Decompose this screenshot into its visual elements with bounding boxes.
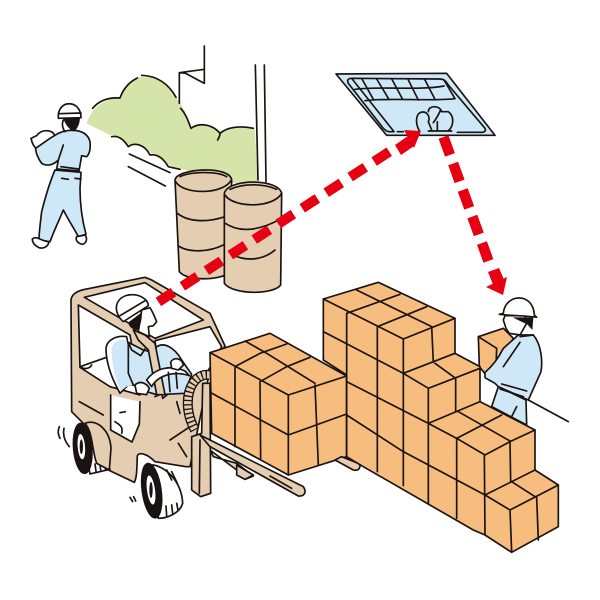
helmet [58, 104, 81, 118]
background scene: bush and wall [87, 46, 282, 292]
steering wheel [147, 368, 189, 387]
seat [106, 336, 135, 393]
worker walking, upper left [31, 104, 90, 248]
wall silhouette [323, 282, 558, 552]
cab roof bar and pillar [133, 330, 165, 395]
hair [513, 317, 533, 330]
rear side window [78, 305, 140, 395]
fork tip behind wall of boxes [335, 457, 360, 470]
jacket details [500, 335, 533, 417]
box edges [323, 290, 558, 552]
mirror inner edge and shelving [348, 78, 485, 132]
icon: oil drum rear [175, 170, 232, 279]
bush [87, 75, 257, 183]
floor line [528, 400, 568, 422]
forklift body and cab frame [71, 277, 225, 482]
helmet [499, 298, 537, 317]
jacket and trouser details [58, 113, 81, 179]
motion marks [58, 427, 136, 502]
lift chain hose [188, 375, 210, 430]
hair [63, 118, 80, 132]
mirror reflection of boxes and figures [417, 107, 453, 131]
carried parcel [31, 131, 54, 152]
stack of boxes on forks [210, 333, 347, 475]
forklift with driver [58, 277, 253, 519]
hands [135, 359, 183, 395]
fork behind stack [210, 450, 253, 479]
shoes [32, 235, 86, 248]
front wheel [139, 462, 183, 519]
face [503, 316, 527, 335]
dashboard and body details [79, 357, 190, 457]
rear wheel [72, 423, 110, 474]
roof window [84, 283, 203, 338]
arrow: mirror to worker with box [444, 137, 507, 295]
fork [200, 435, 305, 496]
worker with box, right [478, 298, 542, 425]
forklift front: mast and forks [188, 375, 305, 497]
box edges [210, 341, 347, 475]
trousers [39, 170, 86, 242]
overhead convex mirror [336, 73, 495, 135]
arrow: line of sight from driver to mirror [158, 130, 421, 302]
front window [155, 327, 222, 398]
trousers [492, 387, 527, 425]
mast [192, 383, 211, 497]
mirror frame [336, 73, 495, 135]
driver [106, 295, 192, 395]
wall corner and pillar [128, 46, 266, 186]
box block [210, 333, 347, 475]
icon: oil drum front [224, 182, 282, 292]
wheel arch rear [85, 422, 111, 470]
wall of boxes [323, 282, 558, 552]
jacket [485, 335, 542, 400]
driver legs [111, 395, 140, 442]
jacket [36, 130, 90, 171]
driver torso [128, 342, 192, 395]
carried box [478, 328, 513, 376]
driver head [116, 295, 157, 337]
